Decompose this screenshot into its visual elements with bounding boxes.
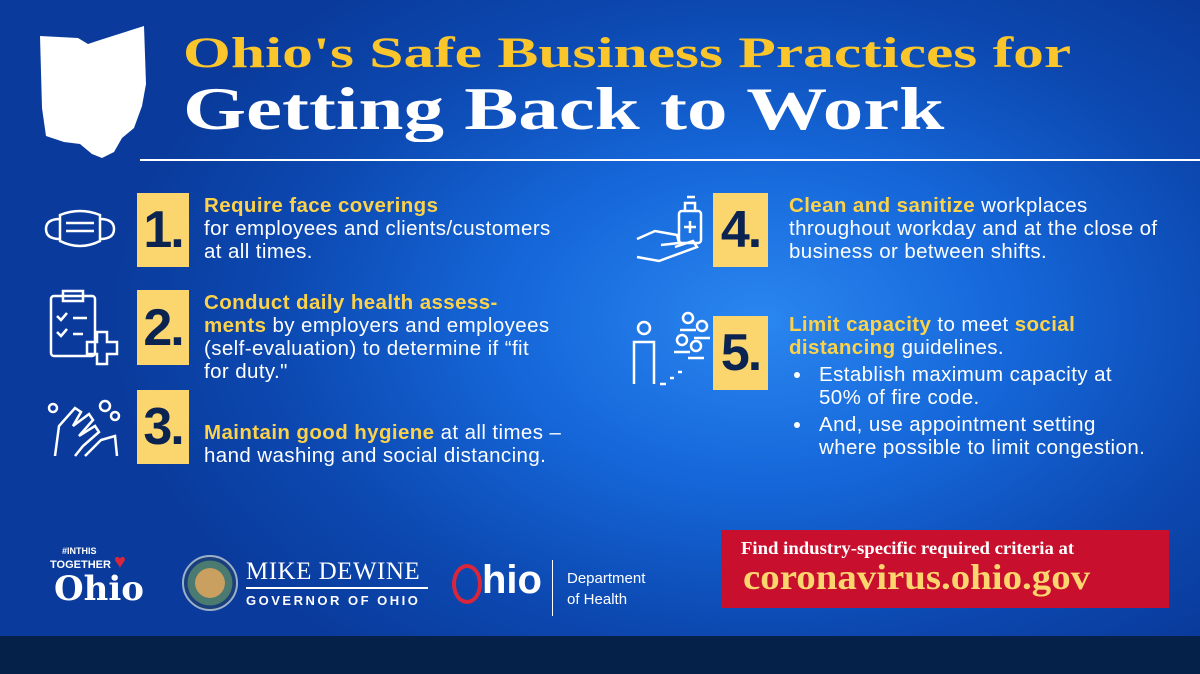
logo: In This Together Ohio: TOGETHER ♥	[50, 551, 126, 573]
logo: Ohio Department of Health: hio	[482, 558, 542, 602]
logo: Mike DeWine seal	[182, 555, 428, 611]
text 1	[204, 194, 551, 263]
number 3	[137, 390, 189, 464]
callout: website: Find industry-specific required criteria at	[741, 538, 1074, 558]
icon: people capacity	[632, 312, 710, 386]
item 1	[44, 193, 551, 267]
icon: clipboard	[50, 290, 118, 366]
footer band	[0, 636, 1200, 674]
text 1: Require face coverings	[204, 194, 438, 217]
number 4	[713, 193, 768, 267]
number 1	[137, 193, 189, 267]
item 3	[48, 390, 561, 467]
icon: hand washing	[48, 400, 120, 457]
number 2	[137, 290, 189, 365]
logo: Mike DeWine seal: GOVERNOR OF OHIO	[246, 593, 420, 608]
number 2: 2.	[143, 298, 183, 356]
item 5	[632, 312, 1145, 459]
logo: In This Together Ohio: #INTHIS	[62, 546, 97, 556]
logo: Ohio Department of Health	[452, 558, 646, 616]
text 1: for employees and clients/customers at all times.	[204, 217, 551, 263]
divider	[140, 159, 1200, 161]
text 5: Establish maximum capacity at 50% of fire code.	[819, 363, 1112, 409]
text 2: Conduct daily health assess-	[204, 291, 498, 314]
callout: website	[721, 530, 1169, 608]
title	[183, 30, 1071, 142]
title: Ohio's Safe Business Practices for	[183, 30, 1071, 77]
logo: Mike DeWine seal: MIKE DEWINE	[246, 558, 420, 585]
logo: Ohio Department of Health: Department	[567, 570, 645, 587]
icon: sanitizer hand	[636, 196, 702, 262]
icon: Ohio state outline	[40, 26, 146, 158]
callout: website: coronavirus.ohio.gov	[743, 557, 1090, 597]
number 5	[713, 316, 768, 390]
icon: face mask	[44, 210, 116, 248]
logo: In This Together Ohio: Ohio	[54, 569, 144, 609]
number 1: 1.	[143, 201, 183, 259]
text 2: ments by employers and employees (self-evaluation) to determine if “fit for duty."	[204, 314, 550, 383]
number 3: 3.	[143, 398, 183, 456]
text 5: And, use appointment setting where possible to limit congestion.	[819, 413, 1145, 459]
title: Getting Back to Work	[183, 76, 944, 142]
text 5: Limit capacity to meet social distancing guidelines.	[789, 313, 1075, 359]
logo: In This Together Ohio	[50, 546, 144, 609]
item 2	[50, 290, 550, 383]
text 5	[789, 313, 1145, 459]
icon: state seal	[182, 555, 238, 611]
text 4: Clean and sanitize workplaces throughout workday and at the close of business or between shifts.	[789, 194, 1158, 263]
number 4: 4.	[721, 201, 760, 259]
number 5: 5.	[721, 324, 760, 382]
item 4	[636, 193, 1158, 267]
logo: Ohio Department of Health: of Health	[567, 591, 627, 608]
text 3: Maintain good hygiene at all times – hand washing and social distancing.	[204, 421, 561, 467]
